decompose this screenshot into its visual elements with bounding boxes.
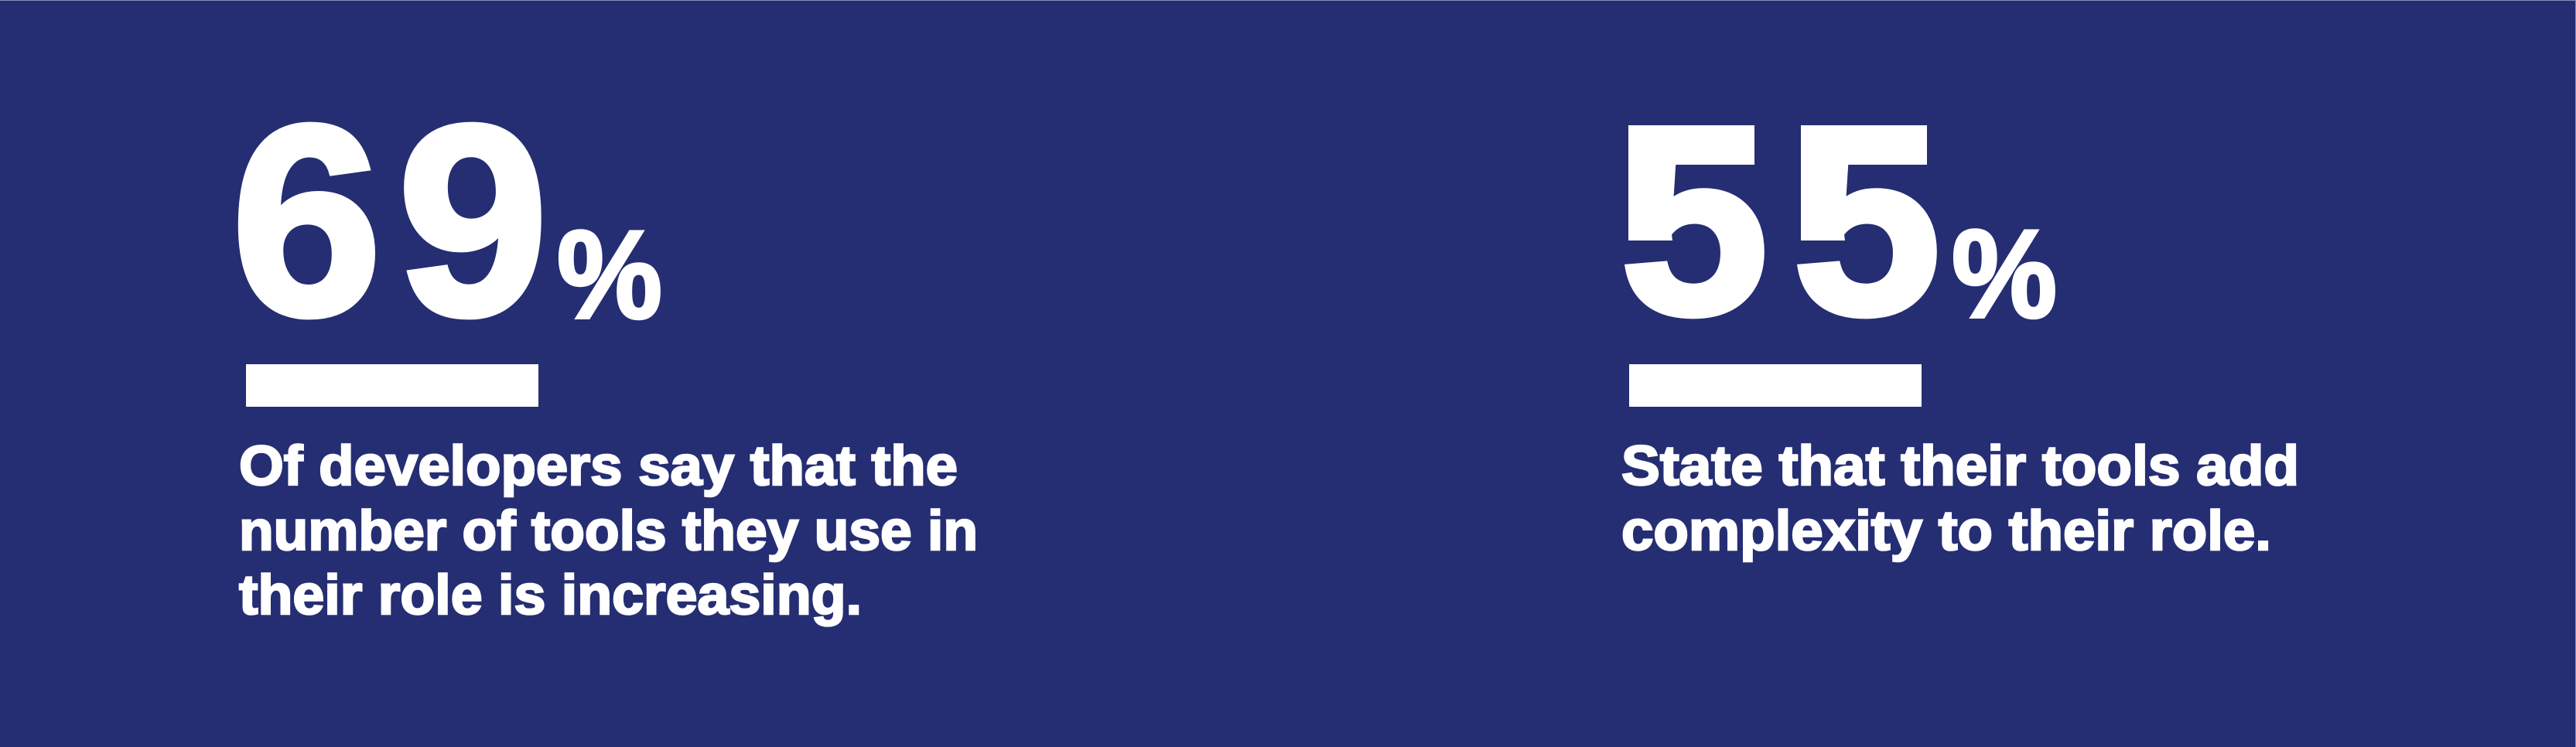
stat number: 69%: 9 (398, 70, 548, 372)
panel: 55 percent statistic (1620, 72, 2299, 562)
description text: Of developers say that the (239, 435, 958, 497)
stat number: 69%: % (557, 205, 662, 345)
stat number: 55% (1620, 72, 2057, 370)
panel: 69 percent statistic (231, 70, 978, 626)
stat number: 55%: 5 (1792, 72, 1941, 370)
stat number: 55%: 5 (1620, 72, 1768, 370)
description text: number of tools they use in (239, 500, 978, 562)
stat number: 55%: % (1952, 204, 2057, 344)
stat number: 69%: 6 (231, 70, 382, 372)
stat number: 69% (231, 70, 662, 372)
divider bar (1629, 364, 1922, 407)
description text: their role is increasing. (239, 565, 862, 626)
divider bar (246, 364, 538, 407)
description text (1621, 435, 2299, 562)
description text: State that their tools add (1621, 435, 2299, 497)
description text: complexity to their role. (1621, 500, 2271, 562)
description text (239, 435, 978, 626)
